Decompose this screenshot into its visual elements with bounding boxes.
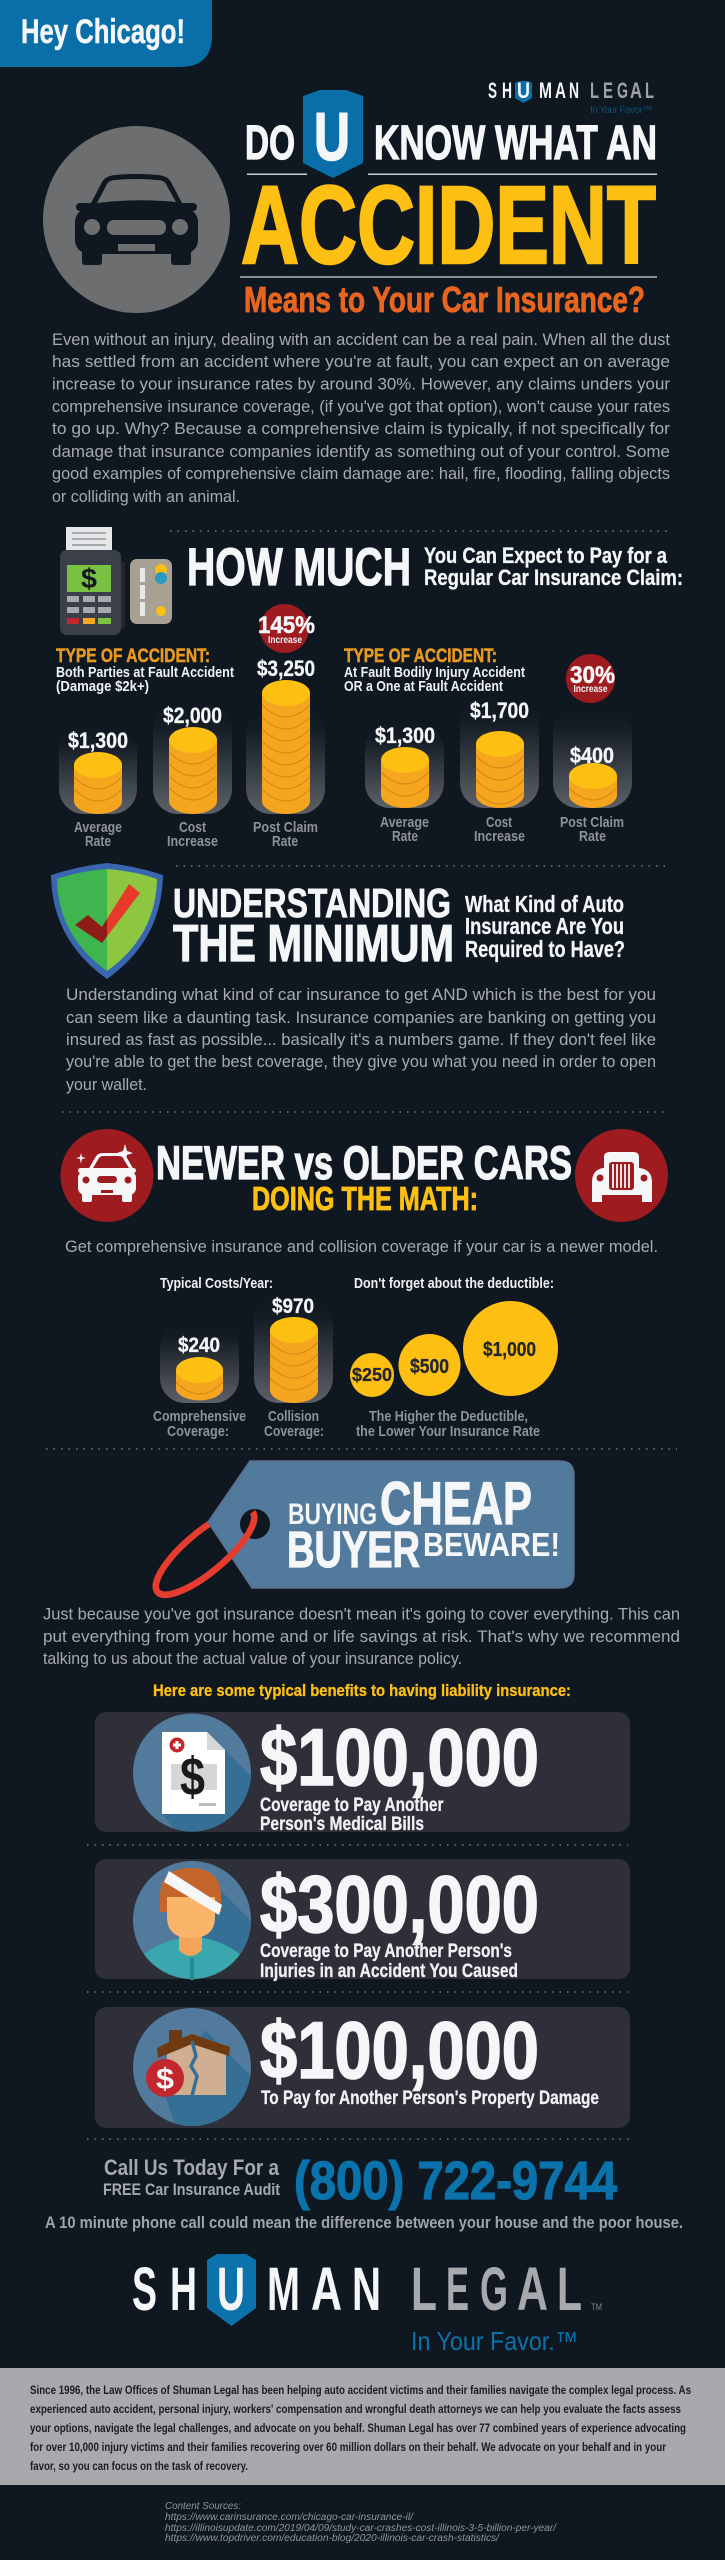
badge: 30% increase <box>566 654 615 703</box>
bar: average rate: $1,300 <box>375 723 435 748</box>
badge: 30% increase: Increase <box>574 684 608 695</box>
coin: $250: $250 <box>352 1365 392 1385</box>
icon: car in gray circle <box>43 126 230 313</box>
heading: how much: Regular Car Insurance Claim: <box>424 565 683 590</box>
icon: injured person <box>133 1861 251 1980</box>
text block: intro: or colliding with an animal. <box>52 487 240 506</box>
text block: intro: increase to your insurance rates by around 30%. However, any claims unders your <box>52 374 670 394</box>
bar: cost increase: Cost <box>486 814 512 831</box>
heading: benefits: Here are some typical benefits to having liability insurance: <box>153 1681 571 1700</box>
text block: understanding: you're able to get the best coverage, they give you what you need in order to open <box>66 1052 656 1071</box>
text block: intro: damage that insurance companies identify as something out of your control. Some <box>52 442 670 461</box>
logo: Shuman Legal large: A <box>517 2255 548 2323</box>
heading: type of accident left: Both Parties at Fault Accident <box>56 664 234 681</box>
logo: Shuman Legal large: S <box>132 2255 157 2323</box>
text block: understanding <box>66 985 656 1094</box>
text block: just because: Just because you've got insurance doesn't mean it's going to cover everything. This can <box>43 1604 680 1624</box>
logo: Shuman Legal small <box>488 78 654 116</box>
logo: Shuman Legal large: L <box>557 2255 582 2323</box>
logo: Shuman Legal small: E <box>603 78 613 103</box>
call to action <box>45 2151 683 2232</box>
price tag: buying cheap buyer beware: CHEAP <box>380 1470 532 1537</box>
icon: damaged house: $ <box>156 2063 174 2096</box>
panel: injuries <box>95 1859 630 1990</box>
chart: deductible coins <box>350 1275 558 1440</box>
logo: Shuman Legal large: H <box>170 2255 197 2323</box>
bar: cost increase: $2,000 <box>163 703 222 728</box>
title: DO <box>245 117 295 170</box>
heading: understanding the minimum: What Kind of Auto <box>465 891 624 917</box>
panel: property damage <box>95 2006 630 2140</box>
bar: average rate: Average <box>74 819 122 836</box>
text block: intro: comprehensive insurance coverage, (if you've got that option), won't cause your rates <box>52 397 670 416</box>
text block: intro <box>52 330 670 506</box>
heading: how much: You Can Expect to Pay for a <box>424 543 668 568</box>
panel: medical bills: Coverage to Pay Another <box>260 1795 444 1816</box>
text block: intro: Even without an injury, dealing with an accident can be a real pain. When all the dust <box>52 330 670 349</box>
heading: understanding the minimum: Required to Have? <box>465 936 625 962</box>
heading: newer vs older cars: DOING THE MATH: <box>252 1180 478 1217</box>
chart: both parties at fault <box>56 604 325 850</box>
bar: post claim rate: $400 <box>570 743 614 768</box>
text block: content sources <box>165 2501 557 2544</box>
heading: newer vs older cars: NEWER vs OLDER CARS <box>156 1136 572 1189</box>
bar: post claim rate: Rate <box>579 828 606 845</box>
logo: Shuman Legal large: M <box>267 2255 300 2323</box>
logo: Shuman Legal small: L <box>645 78 654 103</box>
bar: post claim rate: Rate <box>272 833 298 850</box>
bar: collision: Coverage: <box>264 1423 324 1440</box>
logo: Shuman Legal large: U <box>217 2255 245 2323</box>
bar: collision: Collision <box>268 1408 319 1425</box>
heading: newer vs older cars <box>156 1136 572 1217</box>
heading: understanding the minimum <box>173 880 625 973</box>
bar: post claim rate: Post Claim <box>253 819 318 836</box>
logo: Shuman Legal large <box>132 2254 602 2356</box>
bar: cost increase: Cost <box>179 819 206 836</box>
coin: $500 <box>398 1334 460 1396</box>
text block: intro: has settled from an accident where you're at fault, you can expect an on average <box>52 352 670 371</box>
bar: average rate: Rate <box>85 833 111 850</box>
icon: medical bill: $ <box>180 1747 205 1807</box>
logo: Shuman Legal large: N <box>352 2255 381 2323</box>
bar: cost increase: $1,700 <box>470 698 529 723</box>
bar: cost increase <box>460 698 539 845</box>
text block: just because: talking to us about the actual value of your insurance policy. <box>43 1649 462 1668</box>
bar: cost increase: Increase <box>167 833 218 850</box>
bar: comprehensive <box>153 1323 246 1440</box>
chart: deductible coins: The Higher the Deductible, <box>369 1408 528 1425</box>
title: U <box>314 99 350 175</box>
heading: type of accident right: TYPE OF ACCIDENT: <box>344 646 497 667</box>
text block: content sources: Content Sources: <box>165 2501 241 2512</box>
logo: Shuman Legal small: H <box>502 78 512 103</box>
icon: new car <box>60 1129 154 1222</box>
tab: Hey Chicago <box>0 0 212 67</box>
bar: average rate: $1,300 <box>68 728 128 753</box>
heading: understanding the minimum: THE MINIMUM <box>173 915 454 973</box>
icon: payment terminal and card: $ <box>81 563 97 594</box>
bar: post claim rate <box>246 656 325 850</box>
bar: average rate <box>365 723 444 845</box>
heading: understanding the minimum: Insurance Are You <box>465 913 624 939</box>
panel: about Shuman Legal <box>0 2368 725 2485</box>
text block: just because: put everything from your home and or life savings at risk. That's why we recommend <box>43 1627 680 1646</box>
text block: understanding: insured as fast as possible... basically it's a numbers game. If they don't feel like <box>66 1030 656 1049</box>
text block: understanding: Understanding what kind of car insurance to get AND which is the best for you <box>66 985 656 1004</box>
logo: Shuman Legal small: A <box>630 78 642 103</box>
logo: Shuman Legal large: TM <box>591 2302 602 2312</box>
logo: Shuman Legal small: G <box>617 78 628 103</box>
coin: $1,000 <box>463 1301 558 1396</box>
call to action: Call Us Today For a <box>104 2155 280 2180</box>
price tag: buying cheap buyer beware <box>145 1461 574 1607</box>
coin: $1,000: $1,000 <box>483 1339 536 1361</box>
bar: comprehensive: Comprehensive <box>153 1408 246 1425</box>
icon: payment terminal and card <box>60 527 172 635</box>
text block: get comprehensive: Get comprehensive insurance and collision coverage if your car is a newer model. <box>65 1237 658 1256</box>
panel: injuries: $300,000 <box>260 1860 539 1950</box>
bar: post claim rate <box>553 707 632 845</box>
logo: Shuman Legal small: In Your Favor™ <box>590 105 652 116</box>
icon: shield with check <box>51 863 163 979</box>
logo: Shuman Legal large: E <box>446 2255 469 2323</box>
bar: average rate: Average <box>380 814 429 831</box>
panel: injuries: Coverage to Pay Another Person's <box>260 1941 512 1962</box>
text block: understanding: can seem like a daunting task. Insurance companies are banking on getting you <box>66 1008 656 1027</box>
text block: just because <box>43 1604 680 1668</box>
heading: type of accident right <box>344 646 525 695</box>
title <box>240 90 657 320</box>
panel: medical bills: Person's Medical Bills <box>260 1814 424 1835</box>
coin: $500: $500 <box>410 1356 449 1378</box>
text block: content sources: https://www.carinsurance.com/chicago-car-insurance-il/ <box>165 2512 414 2523</box>
text block: intro: to go up. Why? Because a comprehensive claim is typically, if not specifically for <box>52 419 670 438</box>
chart: typical costs per year <box>153 1275 333 1440</box>
logo: Shuman Legal small: U <box>517 78 530 103</box>
bar: cost increase <box>153 703 232 850</box>
icon: old car <box>575 1129 668 1222</box>
chart: typical costs per year: Typical Costs/Year: <box>160 1275 273 1292</box>
panel: property damage: To Pay for Another Person's Property Damage <box>261 2088 599 2109</box>
badge: 145% increase <box>258 604 315 653</box>
bar: average rate <box>59 727 137 850</box>
logo: Shuman Legal small: L <box>590 78 599 103</box>
bar: collision <box>254 1295 333 1440</box>
text block: content sources: https://www.topdriver.com/education-blog/2020-illinois-car-crash-statistics/ <box>165 2533 500 2544</box>
tab: Hey Chicago: Hey Chicago! <box>21 13 185 51</box>
text block: content sources: https://illinoisupdate.com/2019/04/09/study-car-crashes-cost-illinois-3-5-billion-per-year/ <box>165 2523 557 2534</box>
heading: how much <box>187 538 683 597</box>
badge: 145% increase: Increase <box>268 635 302 646</box>
price tag: buying cheap buyer beware: BUYER <box>287 1521 420 1578</box>
bar: comprehensive: $240 <box>178 1334 220 1357</box>
text block: understanding: your wallet. <box>66 1075 147 1094</box>
logo: Shuman Legal small: M <box>539 78 552 103</box>
heading: type of accident left: (Damage $2k+) <box>56 678 149 695</box>
badge: 30% increase: 30% <box>570 662 615 689</box>
price tag: buying cheap buyer beware: BUYING <box>288 1498 377 1531</box>
icon: damaged house <box>133 2008 251 2126</box>
bar: post claim rate: Post Claim <box>560 814 624 831</box>
panel: about Shuman Legal: favor, so you can focus on the task of recovery. <box>30 2459 248 2473</box>
panel: injuries: Injuries in an Accident You Caused <box>260 1961 518 1982</box>
chart: deductible coins: the Lower Your Insurance Rate <box>356 1423 540 1440</box>
call to action: (800) 722-9744 <box>294 2151 617 2211</box>
panel: property damage: $100,000 <box>260 2006 539 2096</box>
panel: medical bills: $100,000 <box>260 1713 539 1803</box>
bar: collision: $970 <box>272 1295 314 1318</box>
logo: Shuman Legal large: A <box>311 2255 342 2323</box>
heading: type of accident right: OR a One at Fault Accident <box>344 678 503 695</box>
logo: Shuman Legal large: G <box>480 2255 508 2323</box>
call to action: FREE Car Insurance Audit <box>103 2180 280 2199</box>
bar: cost increase: Increase <box>474 828 525 845</box>
heading: type of accident left: TYPE OF ACCIDENT: <box>56 646 210 667</box>
heading: type of accident right: At Fault Bodily Injury Accident <box>344 664 525 681</box>
icon: medical bill <box>133 1714 251 1832</box>
logo: Shuman Legal small: S <box>488 78 497 103</box>
logo: Shuman Legal small: N <box>569 78 579 103</box>
logo: Shuman Legal large: In Your Favor.™ <box>411 2326 578 2356</box>
chart: at fault bodily injury <box>344 646 632 845</box>
price tag: buying cheap buyer beware: BEWARE! <box>423 1526 560 1563</box>
logo: Shuman Legal large: L <box>411 2255 437 2323</box>
bar: comprehensive: Coverage: <box>167 1423 229 1440</box>
heading: how much: HOW MUCH <box>187 538 411 597</box>
panel: medical bills <box>95 1712 630 1832</box>
heading: understanding the minimum: UNDERSTANDING <box>173 880 451 926</box>
text block: intro: good examples of comprehensive claim damage are: hail, fire, flooding, falling objects <box>52 464 670 483</box>
bar: post claim rate: $3,250 <box>257 656 315 681</box>
heading: type of accident left <box>56 646 234 695</box>
chart: deductible coins: Don't forget about the deductible: <box>354 1275 554 1292</box>
badge: 145% increase: 145% <box>258 612 315 639</box>
logo: Shuman Legal small: A <box>555 78 566 103</box>
bar: average rate: Rate <box>392 828 418 845</box>
coin: $250 <box>350 1353 394 1397</box>
